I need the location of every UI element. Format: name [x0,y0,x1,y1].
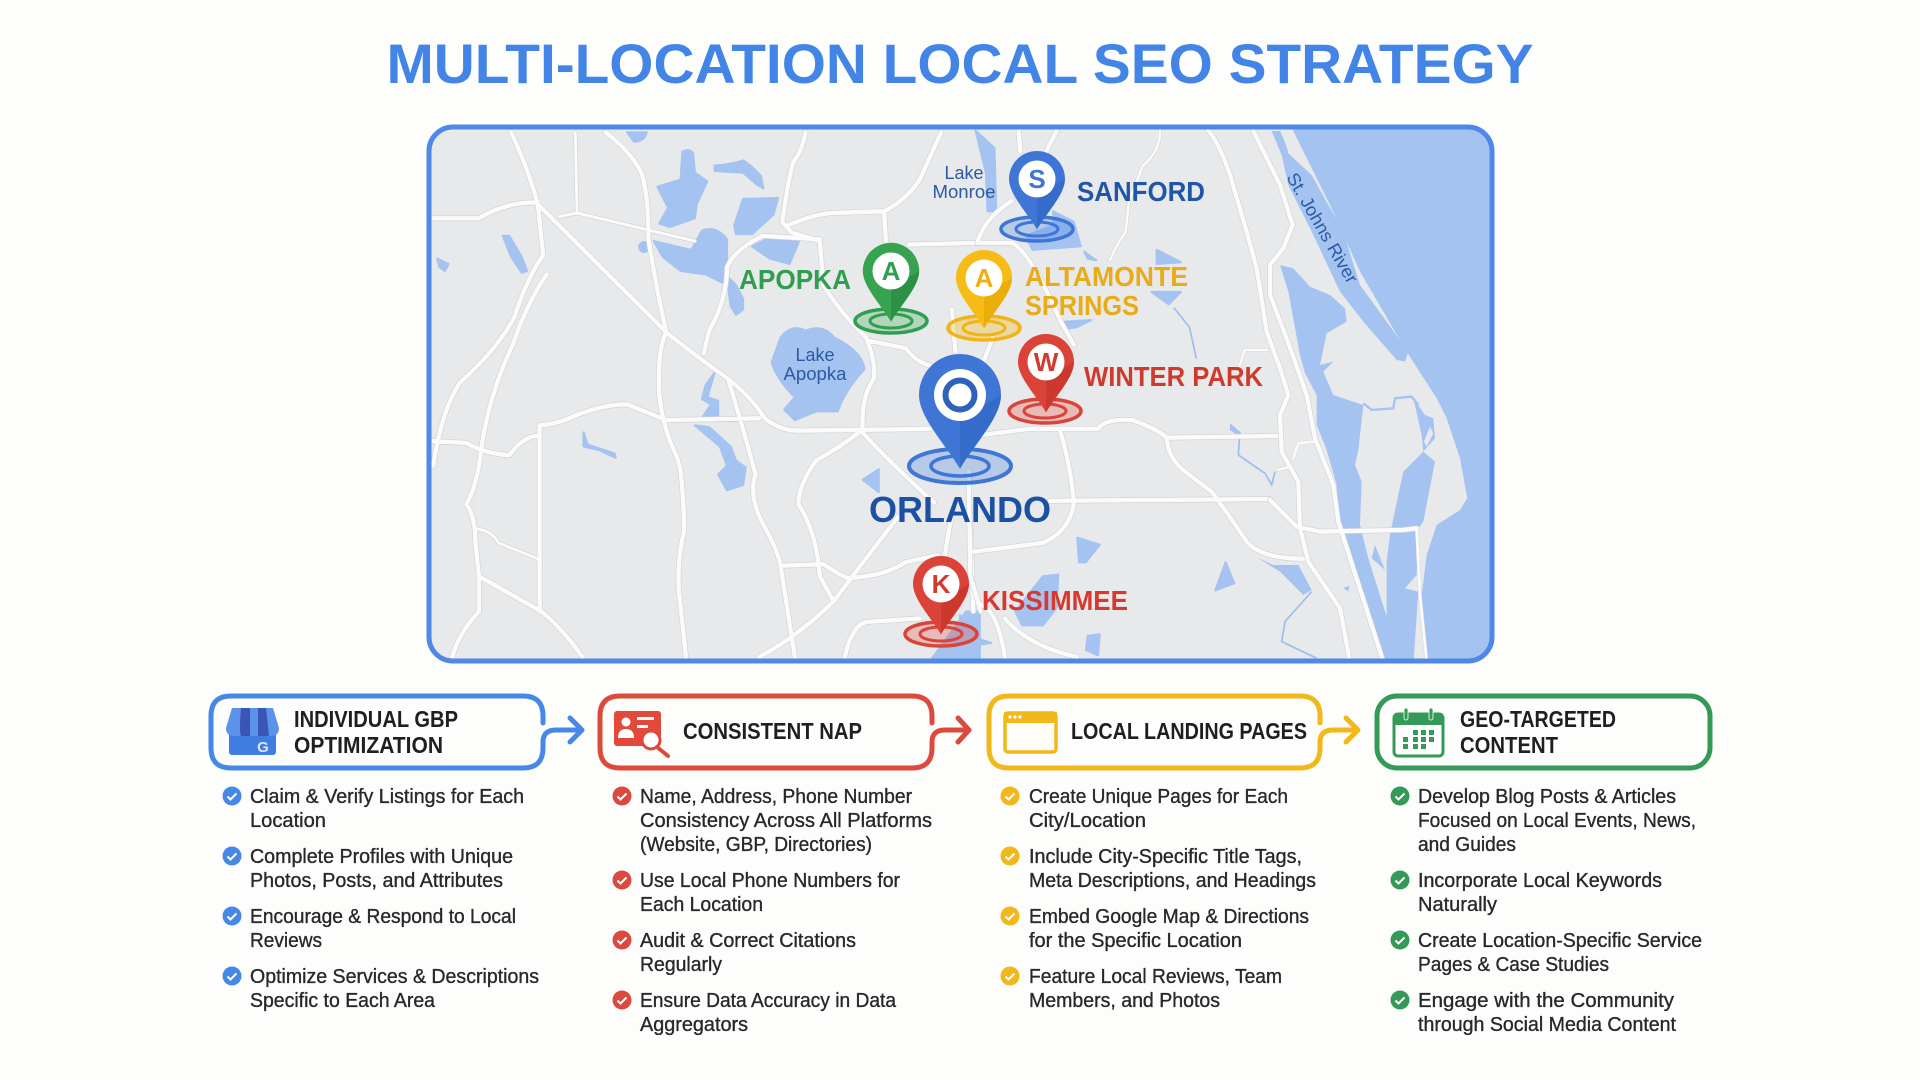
bullet list: Create Location-Specific Service [1418,930,1702,952]
water west [437,132,980,661]
bullet list: Location [250,810,326,832]
bullet list: Name, Address, Phone Number [640,786,912,808]
title: MULTI-LOCATION LOCAL SEO STRATEGY [386,32,1534,95]
label: Kissimmee: KISSIMMEE [982,585,1128,616]
heading: GEO-TARGETED [1460,706,1616,732]
icon: calendar [1393,708,1444,756]
label: Altamonte Springs: ALTAMONTE [1025,261,1188,292]
header box [1377,696,1710,768]
panel: Consistent NAP [600,696,969,1036]
panel: map [429,125,1503,665]
bullet list: Photos, Posts, and Attributes [250,870,503,892]
heading: LOCAL LANDING PAGES [1071,718,1307,744]
label: Apopka: APOPKA [739,264,851,295]
header box [989,696,1358,768]
pin: Apopka [855,243,927,333]
label: Lake Monroe: Lake [944,163,984,183]
heading [294,706,458,758]
bullet list: Reviews [250,930,322,952]
bullet list: (Website, GBP, Directories) [640,834,872,856]
label: St. Johns River: St. Johns River [1283,169,1362,287]
bullet list: Optimize Services & Descriptions [250,966,539,988]
bullet list: for the Specific Location [1029,930,1242,952]
bullet list: Meta Descriptions, and Headings [1029,870,1316,892]
bullet list: Ensure Data Accuracy in Data [640,990,897,1012]
bullet list: Regularly [640,954,722,976]
bullet list: Aggregators [640,1014,748,1036]
label: Altamonte Springs [1025,261,1188,321]
bullet list: Embed Google Map & Directions [1029,906,1309,928]
icon: storefront [226,708,279,756]
icon: browser window [1004,712,1057,752]
bullet list: City/Location [1029,810,1146,832]
heading: INDIVIDUAL GBP [294,706,458,732]
bullet list: Include City-Specific Title Tags, [1029,846,1302,868]
heading: CONTENT [1460,732,1558,758]
water central [960,131,1234,655]
bullet list: Naturally [1418,894,1497,916]
bullet list: Specific to Each Area [250,990,436,1012]
label: Lake Apopka: Lake [795,345,835,365]
bullet list [1000,786,1316,1012]
pin: Altamonte Springs: A [975,263,994,293]
bullet list [222,786,539,1012]
label: Sanford: SANFORD [1077,176,1205,207]
label: Orlando: ORLANDO [869,489,1051,530]
label: Lake Apopka [784,345,848,384]
pin: Orlando [909,354,1011,483]
bullet list: Develop Blog Posts & Articles [1418,786,1676,808]
heading [1460,706,1616,758]
panel: Local Landing Pages [989,696,1358,1012]
pin: Apopka: A [882,256,901,286]
water east coast [1230,125,1503,665]
bullet list: through Social Media Content [1418,1014,1676,1036]
bullet list: Feature Local Reviews, Team [1029,966,1282,988]
heading: CONSISTENT NAP [683,718,862,744]
roads [433,132,980,657]
pin: Sanford [1001,151,1073,241]
bullet list: Focused on Local Events, News, [1418,810,1696,832]
icon: ID card with magnifier [614,711,668,756]
bullet list: Incorporate Local Keywords [1418,870,1662,892]
header box [211,696,582,768]
map frame [429,127,1492,661]
label: Lake Monroe: Monroe [932,182,996,202]
bullet list: and Guides [1418,834,1516,856]
bullet list: Engage with the Community [1418,990,1674,1012]
panel: Geo-Targeted Content [1377,696,1710,1036]
icon: storefront: G [257,739,269,756]
bullet list [1390,786,1702,1036]
heading: OPTIMIZATION [294,732,443,758]
pin: Kissimmee [905,556,977,646]
bullet list: Claim & Verify Listings for Each [250,786,524,808]
bullet list: Encourage & Respond to Local [250,906,516,928]
bullet list: Each Location [640,894,763,916]
pin: Winter Park [1009,334,1081,423]
pin: Kissimmee: K [932,569,951,599]
label: Winter Park: WINTER PARK [1084,361,1263,392]
label: Altamonte Springs: SPRINGS [1025,290,1139,321]
pin: Winter Park: W [1034,347,1059,377]
bullet list: Create Unique Pages for Each [1029,786,1288,808]
bullet list: Complete Profiles with Unique [250,846,513,868]
label: Lake Monroe [932,163,996,202]
header box [600,696,969,768]
bullet list: Use Local Phone Numbers for [640,870,900,892]
bullet list: Consistency Across All Platforms [640,810,932,832]
bullet list: Pages & Case Studies [1418,954,1609,976]
label: Lake Apopka: Apopka [784,364,848,384]
bullet list [612,786,932,1036]
pin: Sanford: S [1028,164,1046,194]
pin: Altamonte Springs [948,250,1020,340]
panel: Individual GBP Optimization [211,696,582,1012]
bullet list: Audit & Correct Citations [640,930,856,952]
bullet list: Members, and Photos [1029,990,1220,1012]
